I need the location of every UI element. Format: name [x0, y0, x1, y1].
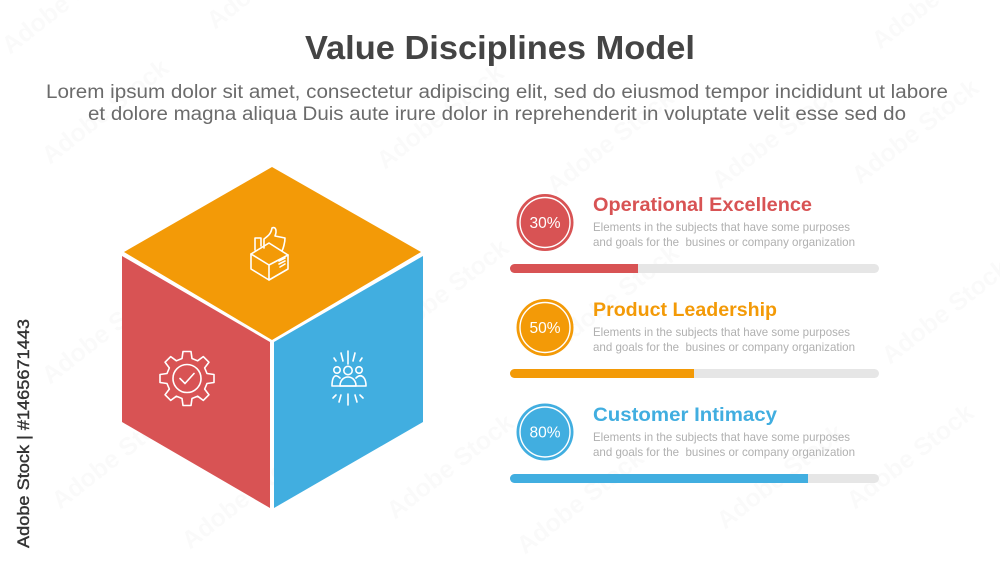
description: Elements in the subjects that have some purposes — [593, 220, 850, 234]
badge 50%: 50% — [529, 320, 561, 337]
row: Operational Excellence — [510, 194, 879, 273]
heading: Operational Excellence — [593, 195, 812, 216]
description — [593, 220, 855, 249]
description: Elements in the subjects that have some purposes — [593, 325, 850, 339]
subtitle text: et dolore magna aliqua Duis aute irure dolor in reprehenderit in voluptate velit esse sed do — [88, 104, 906, 125]
row: Customer Intimacy — [510, 404, 879, 483]
description: and goals for the busines or company organization — [593, 235, 855, 249]
watermark pattern: Adobe Stock — [511, 444, 649, 560]
watermark pattern: Adobe Stock — [371, 59, 509, 175]
watermark pattern: Adobe Stock — [546, 239, 684, 355]
icon: gear with check mark — [160, 352, 214, 406]
icon: box with thumbs up — [251, 228, 288, 280]
watermark pattern: Adobe Stock — [711, 419, 849, 535]
description — [593, 325, 855, 354]
cube face: top orange — [124, 167, 421, 340]
badge 80% — [516, 404, 574, 460]
title: Value Disciplines Model — [305, 29, 695, 66]
description: and goals for the busines or company organization — [593, 445, 855, 459]
description: Elements in the subjects that have some purposes — [593, 430, 850, 444]
icon: group of people with rays — [332, 351, 366, 405]
watermark pattern: Adobe Stock — [706, 79, 844, 195]
stock id vertical text: Adobe Stock | #1465671443 — [14, 319, 33, 548]
subtitle text — [46, 82, 948, 125]
badge 30% — [516, 194, 574, 251]
watermark pattern: Adobe Stock — [381, 409, 519, 525]
subtitle text: Lorem ipsum dolor sit amet, consectetur adipiscing elit, sed do eiusmod tempor incididunt ut labore — [46, 82, 948, 103]
cube diagram — [122, 167, 423, 508]
progress bar 80% — [510, 474, 879, 483]
badge 30%: 30% — [529, 215, 561, 232]
watermark pattern: Adobe Stock — [36, 54, 174, 170]
badge 50% — [516, 299, 574, 356]
watermark pattern: Adobe Stock — [211, 239, 349, 355]
heading: Product Leadership — [593, 300, 777, 321]
row: Product Leadership — [510, 299, 879, 378]
heading: Customer Intimacy — [593, 405, 777, 426]
watermark pattern: Adobe Stock — [541, 84, 679, 200]
progress bar 30% — [510, 264, 879, 273]
badge 80%: 80% — [529, 424, 561, 442]
cube face: right blue — [274, 256, 423, 508]
watermark pattern: Adobe Stock — [46, 399, 184, 515]
watermark pattern: Adobe Stock — [36, 274, 174, 390]
watermark pattern: Adobe Stock — [841, 399, 979, 515]
watermark pattern: Adobe Stock — [376, 234, 514, 350]
progress bar 50% — [510, 369, 879, 378]
description: and goals for the busines or company organization — [593, 340, 855, 354]
watermark pattern: Adobe Stock — [846, 74, 984, 190]
description — [593, 430, 855, 459]
watermark pattern: Adobe Stock — [176, 439, 314, 555]
cube face: left red — [122, 256, 270, 508]
